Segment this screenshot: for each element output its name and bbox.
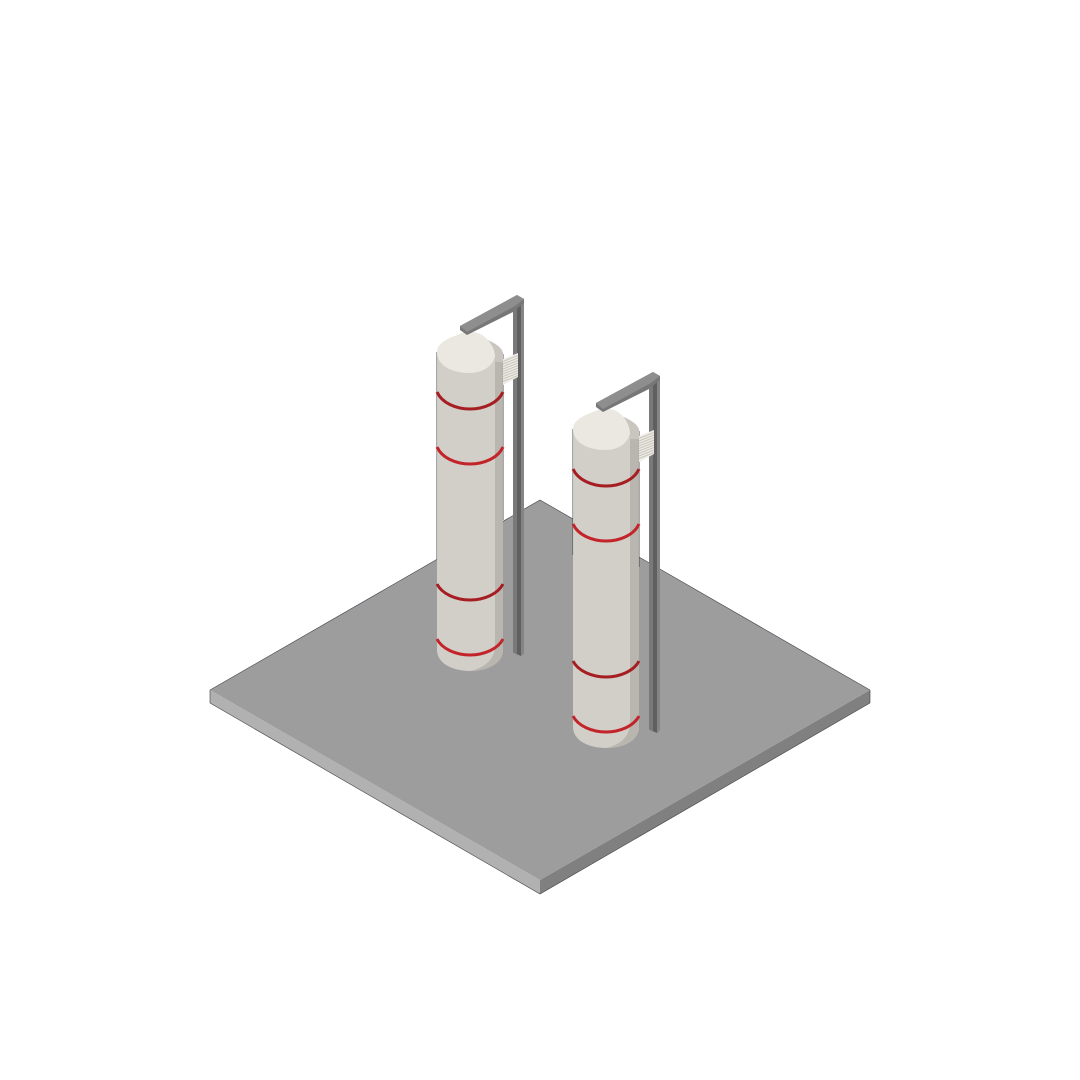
- platform right side face: [540, 690, 870, 894]
- tower 2 dome top: [573, 408, 630, 450]
- tower 1 dome shade: [467, 331, 503, 362]
- tower 2 red bands: [573, 469, 639, 732]
- platform: square concrete slab: [210, 500, 870, 894]
- tower 1 cable tray: [503, 353, 518, 385]
- tower 1 column outline: [437, 352, 503, 560]
- tower 2 dome shade: [603, 408, 639, 439]
- tower 1 pipe: [460, 295, 524, 656]
- tower 1 right shaded strip: [470, 352, 503, 671]
- tower 2 cable tray: [639, 430, 654, 462]
- platform top face: [210, 500, 870, 880]
- tower 1 column body: [437, 352, 503, 671]
- tower 2 column outline: [573, 429, 639, 567]
- tower 1 dome top: [437, 331, 495, 373]
- platform left side face: [210, 690, 540, 894]
- tower 2 right shaded strip: [606, 429, 639, 748]
- tower 2: shorter right column: [573, 372, 660, 748]
- tower 2 pipe: [596, 372, 660, 733]
- tower 2 pipe arm: [596, 372, 660, 412]
- tower 2 column body: [573, 429, 639, 748]
- platform outline: [210, 500, 870, 894]
- tower 1 red bands: [437, 392, 503, 655]
- tower 1: tall left column: [437, 295, 524, 671]
- tower 1 pipe arm: [460, 295, 524, 335]
